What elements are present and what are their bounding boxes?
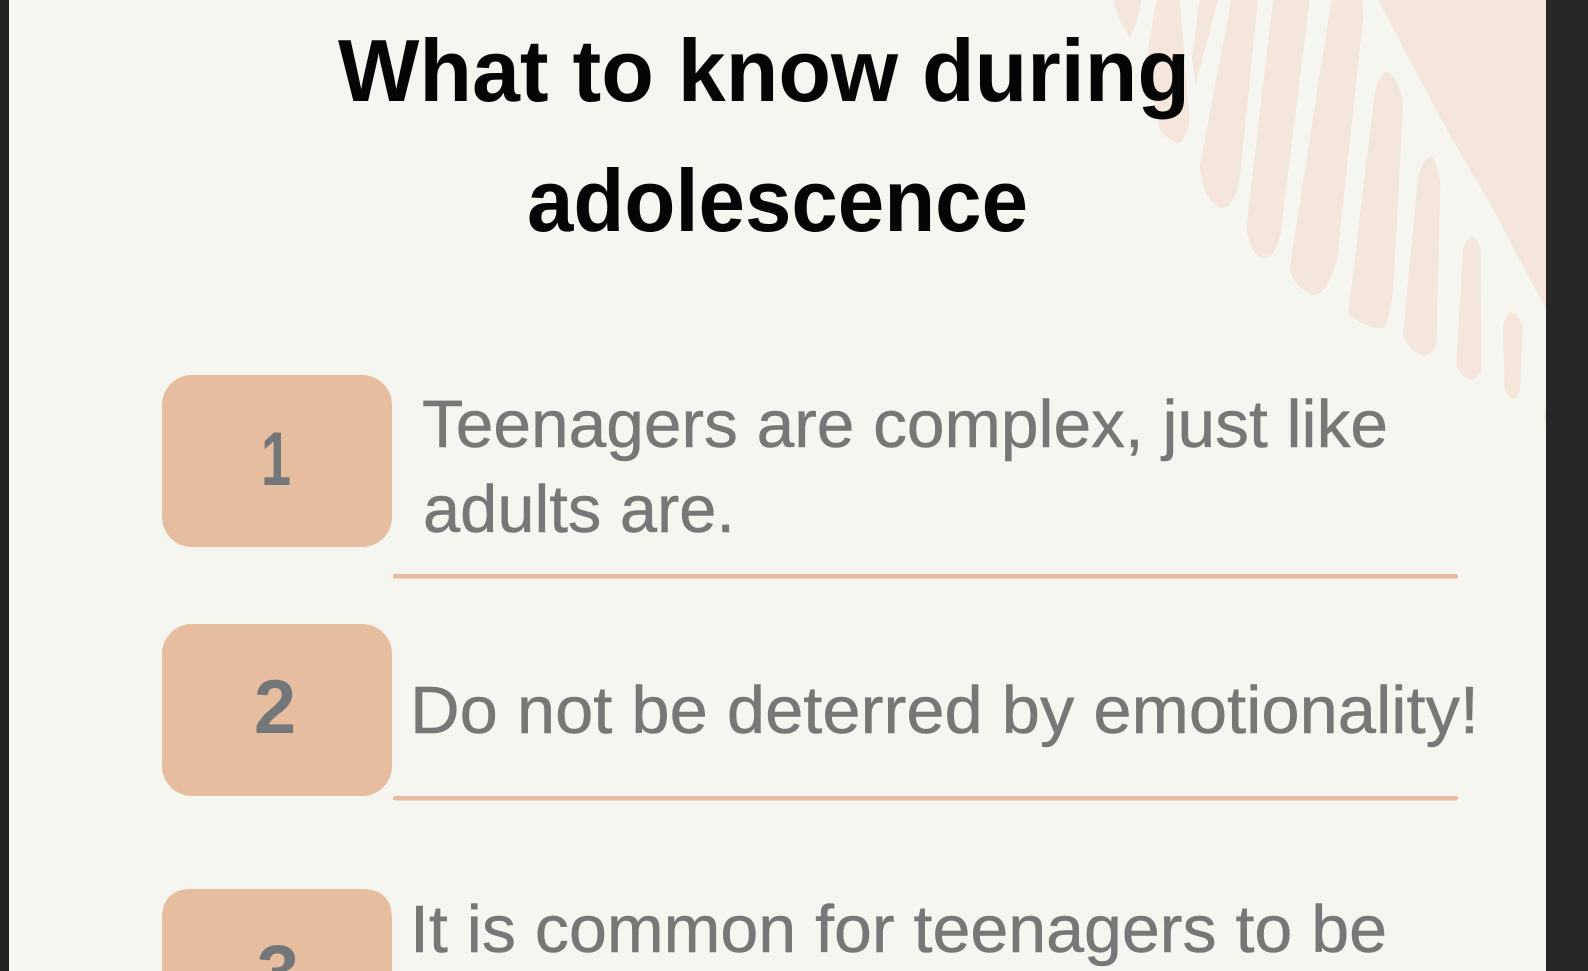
title: [338, 21, 1190, 250]
number badge 1: [162, 375, 392, 547]
item 1: [162, 375, 1388, 547]
item 3 text: It is common for teenagers to be: [410, 892, 1387, 967]
item 1 text: adults are.: [423, 472, 735, 547]
number badge 2: 2: [254, 665, 296, 750]
decoration: leaf shape top right: [1113, 0, 1546, 428]
number badge 1: 1: [261, 417, 291, 502]
item 2 text: Do not be deterred by emotionality!: [410, 673, 1479, 748]
item 1 text: [422, 387, 1388, 547]
left dark edge: [0, 0, 9, 971]
number badge 2: [162, 624, 392, 796]
title: What to know during: [338, 21, 1190, 120]
right dark edge: [1546, 0, 1588, 971]
number badge 3: [162, 889, 392, 971]
item 3: [162, 889, 1387, 971]
item 2: [162, 624, 1479, 796]
title: adolescence: [527, 151, 1028, 250]
item 1 text: Teenagers are complex, just like: [422, 387, 1388, 462]
